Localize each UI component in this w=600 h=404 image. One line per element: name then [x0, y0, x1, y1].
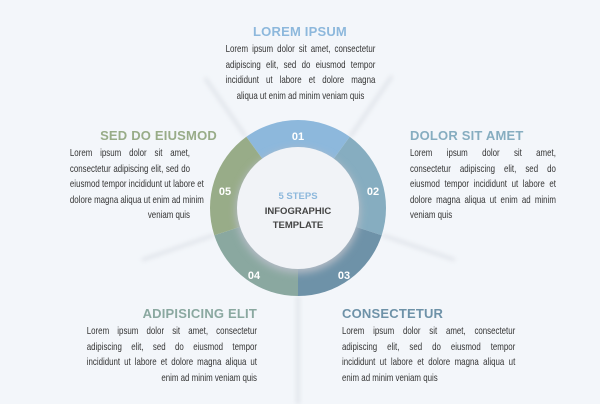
text: top: incididunt ut labore et dolore magna — [225, 75, 375, 86]
text: left: SED DO EIUSMOD — [100, 128, 217, 143]
text: bottom left: Lorem ipsum dolor sit amet, consectetur — [87, 326, 257, 337]
segment numbers: 02 — [367, 186, 379, 198]
text: right: eiusmod tempor incididunt ut labore et — [410, 179, 556, 190]
text: top: LOREM IPSUM — [253, 24, 347, 39]
text: bottom right: CONSECTETUR — [342, 306, 443, 321]
text: bottom left: ADIPISICING ELIT — [143, 306, 257, 321]
ring — [210, 120, 386, 296]
divider shadows — [142, 76, 455, 404]
segment numbers: 04 — [248, 270, 261, 282]
center title: TEMPLATE — [273, 220, 323, 231]
center title: INFOGRAPHIC — [265, 206, 331, 217]
center title: 5 STEPS — [278, 191, 318, 202]
center title — [265, 191, 331, 231]
text: bottom right: enim ad minim veniam quis — [342, 372, 438, 384]
text: top — [225, 24, 376, 102]
text: right: DOLOR SIT AMET — [410, 128, 524, 143]
text: left: Lorem ipsum dolor sit amet, — [70, 148, 190, 159]
text: bottom left: adipiscing elit, sed do eiusmod tempor — [87, 342, 257, 352]
text: right: dolore magna aliqua ut enim ad minim — [410, 194, 556, 206]
segment numbers: 05 — [219, 186, 231, 198]
segment numbers — [219, 131, 379, 282]
text: left: consectetur adipiscing elit, sed do — [70, 164, 190, 174]
segment numbers: 01 — [292, 131, 304, 143]
segment numbers: 03 — [338, 270, 350, 282]
text: bottom left: incididunt ut labore et dolore magna aliqua ut — [87, 357, 257, 368]
text: top: Lorem ipsum dolor sit amet, consectetur — [225, 44, 375, 55]
text: bottom left: enim ad minim veniam quis — [161, 372, 257, 384]
inner circle — [236, 149, 360, 273]
text: left: veniam quis — [148, 210, 190, 221]
text: right: Lorem ipsum dolor sit amet, — [410, 148, 556, 159]
text: top: aliqua ut enim ad minim veniam quis — [236, 90, 364, 102]
text: bottom right: adipiscing elit, sed do eiusmod tempor — [342, 342, 515, 352]
text: right: veniam quis — [410, 210, 452, 221]
text: bottom right: Lorem ipsum dolor sit amet, consectetur — [342, 326, 515, 337]
text: left: eiusmod tempor incididunt ut labore et — [70, 179, 204, 190]
text: left: dolore magna aliqua ut enim ad minim — [70, 194, 204, 206]
text: right: consectetur adipiscing elit, sed do — [410, 164, 556, 174]
text: bottom right: incididunt ut labore et dolore magna aliqua ut — [342, 357, 515, 368]
text: bottom left — [87, 306, 257, 384]
text: bottom right — [342, 306, 516, 384]
text: top: adipiscing elit, sed do eiusmod tempor — [225, 60, 375, 70]
text: right — [410, 128, 556, 221]
text: left — [70, 128, 217, 221]
